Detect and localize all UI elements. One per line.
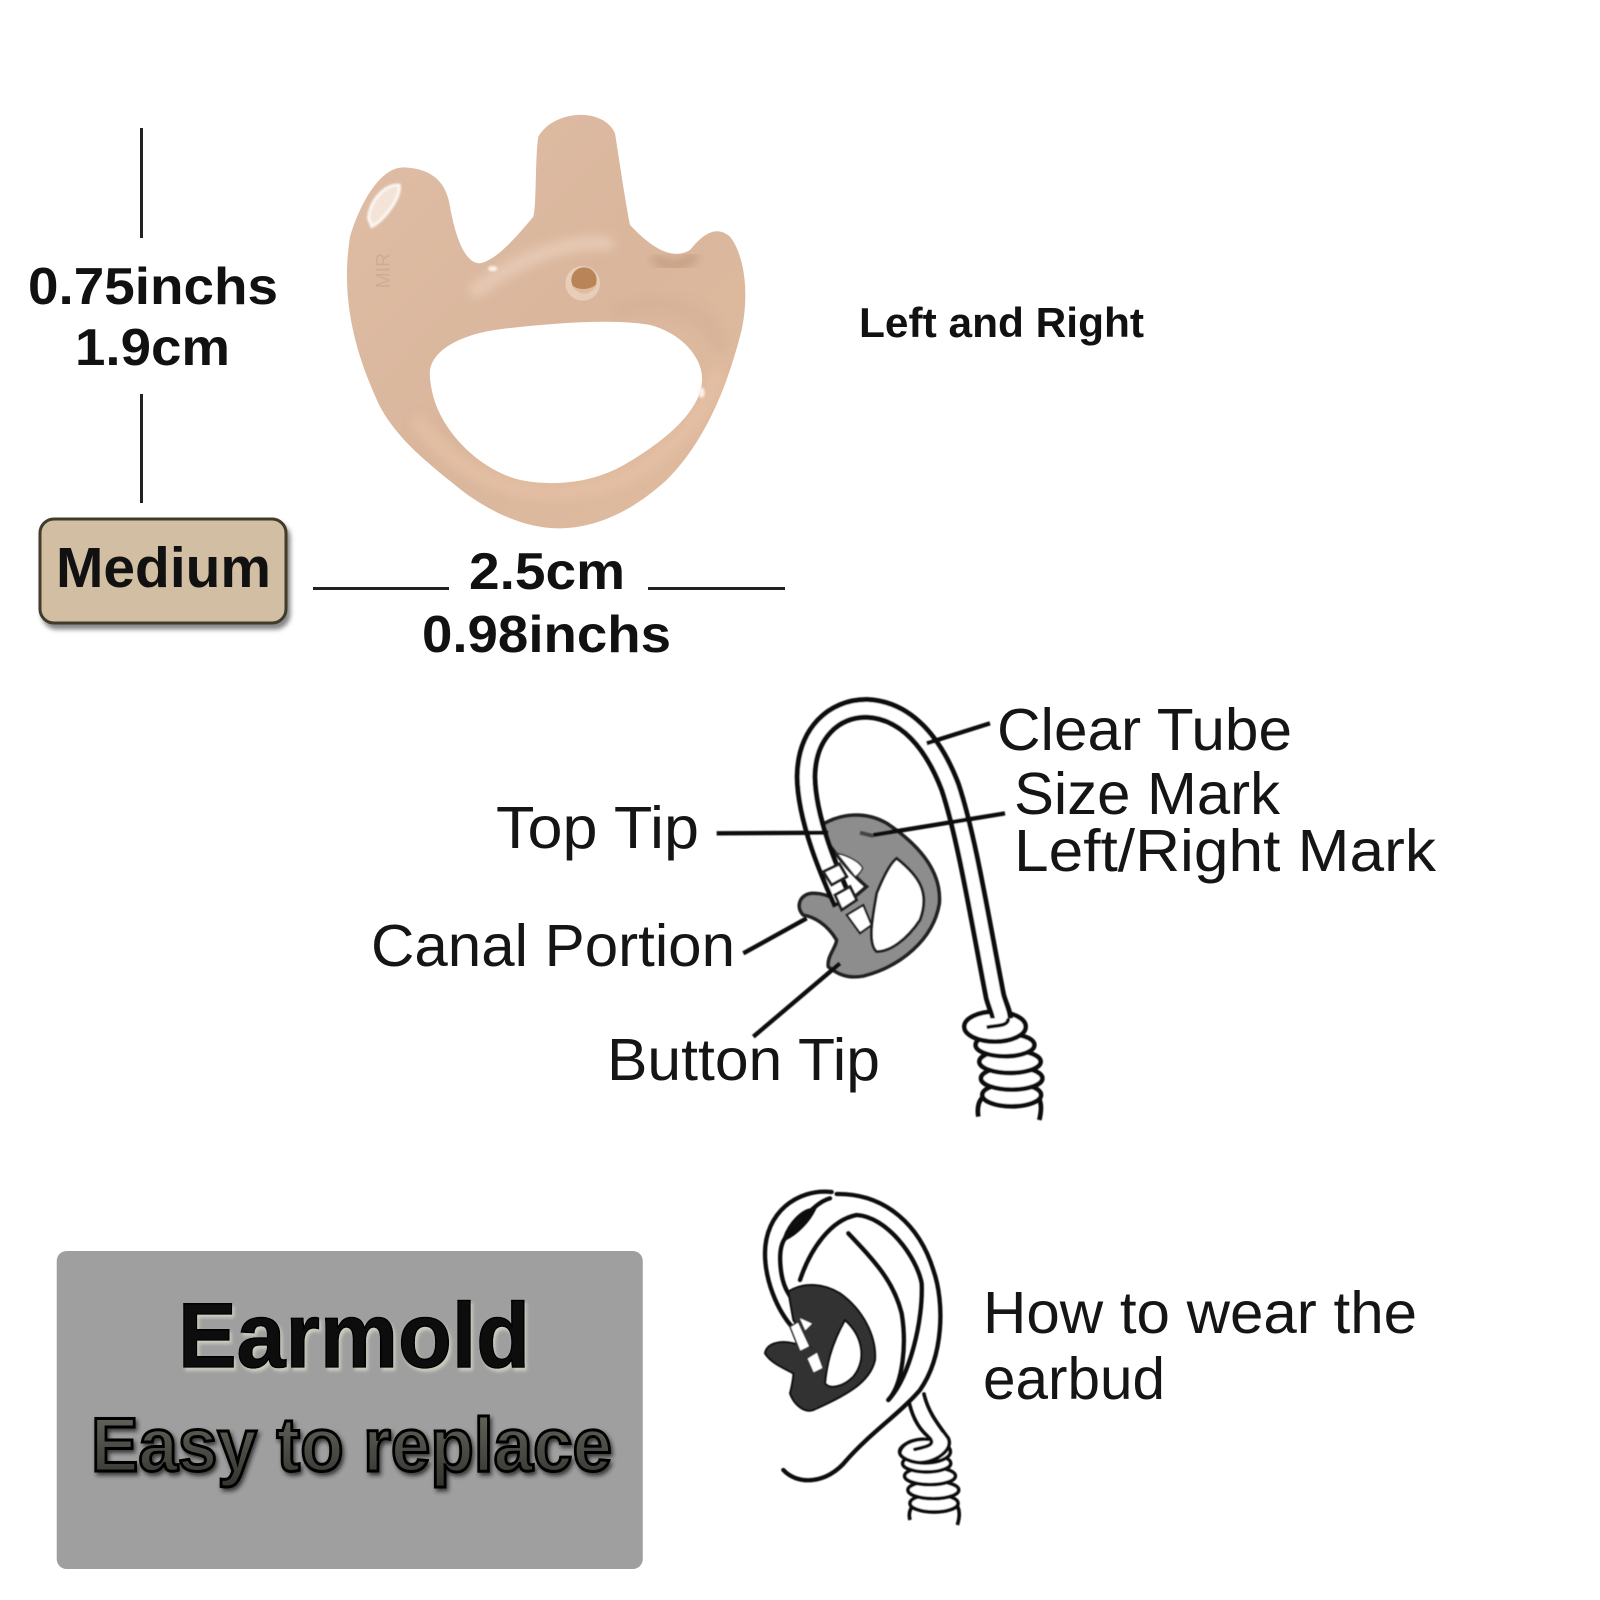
label: left/right mark: Left/Right Mark — [1014, 818, 1437, 884]
width in inches: 0.98inchs — [422, 606, 671, 664]
caption: how to wear: How to wear the — [983, 1280, 1417, 1346]
glossy highlight — [368, 185, 400, 227]
diagram: earmold parts with tube — [717, 708, 1042, 1120]
annotation: left and right: Left and Right — [859, 299, 1144, 346]
clear tube — [806, 708, 1008, 1027]
size badge: medium — [40, 519, 286, 623]
label: clear tube: Clear Tube — [997, 697, 1292, 763]
panel subheading: Easy to replace — [91, 1403, 612, 1488]
label: button tip: Button Tip — [607, 1027, 880, 1093]
photo: beige earmold — [347, 115, 745, 528]
height dimension — [28, 128, 278, 503]
width dimension — [313, 543, 785, 664]
tube tip segments — [790, 1317, 823, 1373]
label: top tip: Top Tip — [496, 795, 699, 861]
width in centimetres: 2.5cm — [469, 543, 625, 601]
leader lines — [717, 723, 1005, 1037]
sound hole — [565, 266, 600, 301]
black earmold — [765, 1285, 875, 1411]
coiled tube — [900, 1440, 959, 1525]
gray earmold — [799, 815, 939, 977]
caption: how to wear — [983, 1280, 1417, 1412]
height in inches: 0.75inchs — [28, 258, 278, 316]
tube below ear — [900, 1433, 950, 1457]
panel: earmold easy to replace — [57, 1251, 643, 1569]
diagram: earmold worn in ear — [765, 1192, 959, 1525]
shading on the mold — [420, 243, 720, 492]
coiled tube — [964, 1012, 1042, 1120]
panel heading: Earmold — [178, 1285, 530, 1387]
label: canal portion: Canal Portion — [371, 913, 735, 979]
tube tip segments — [823, 864, 872, 933]
size badge: medium: Medium — [56, 536, 271, 600]
caption: how to wear: earbud — [983, 1346, 1165, 1412]
moulded size mark: MIR — [373, 253, 394, 288]
tube over ear — [765, 1192, 832, 1328]
label: size mark: Size Mark — [1014, 761, 1280, 827]
height in centimetres: 1.9cm — [75, 319, 230, 377]
ear outline — [783, 1194, 940, 1480]
